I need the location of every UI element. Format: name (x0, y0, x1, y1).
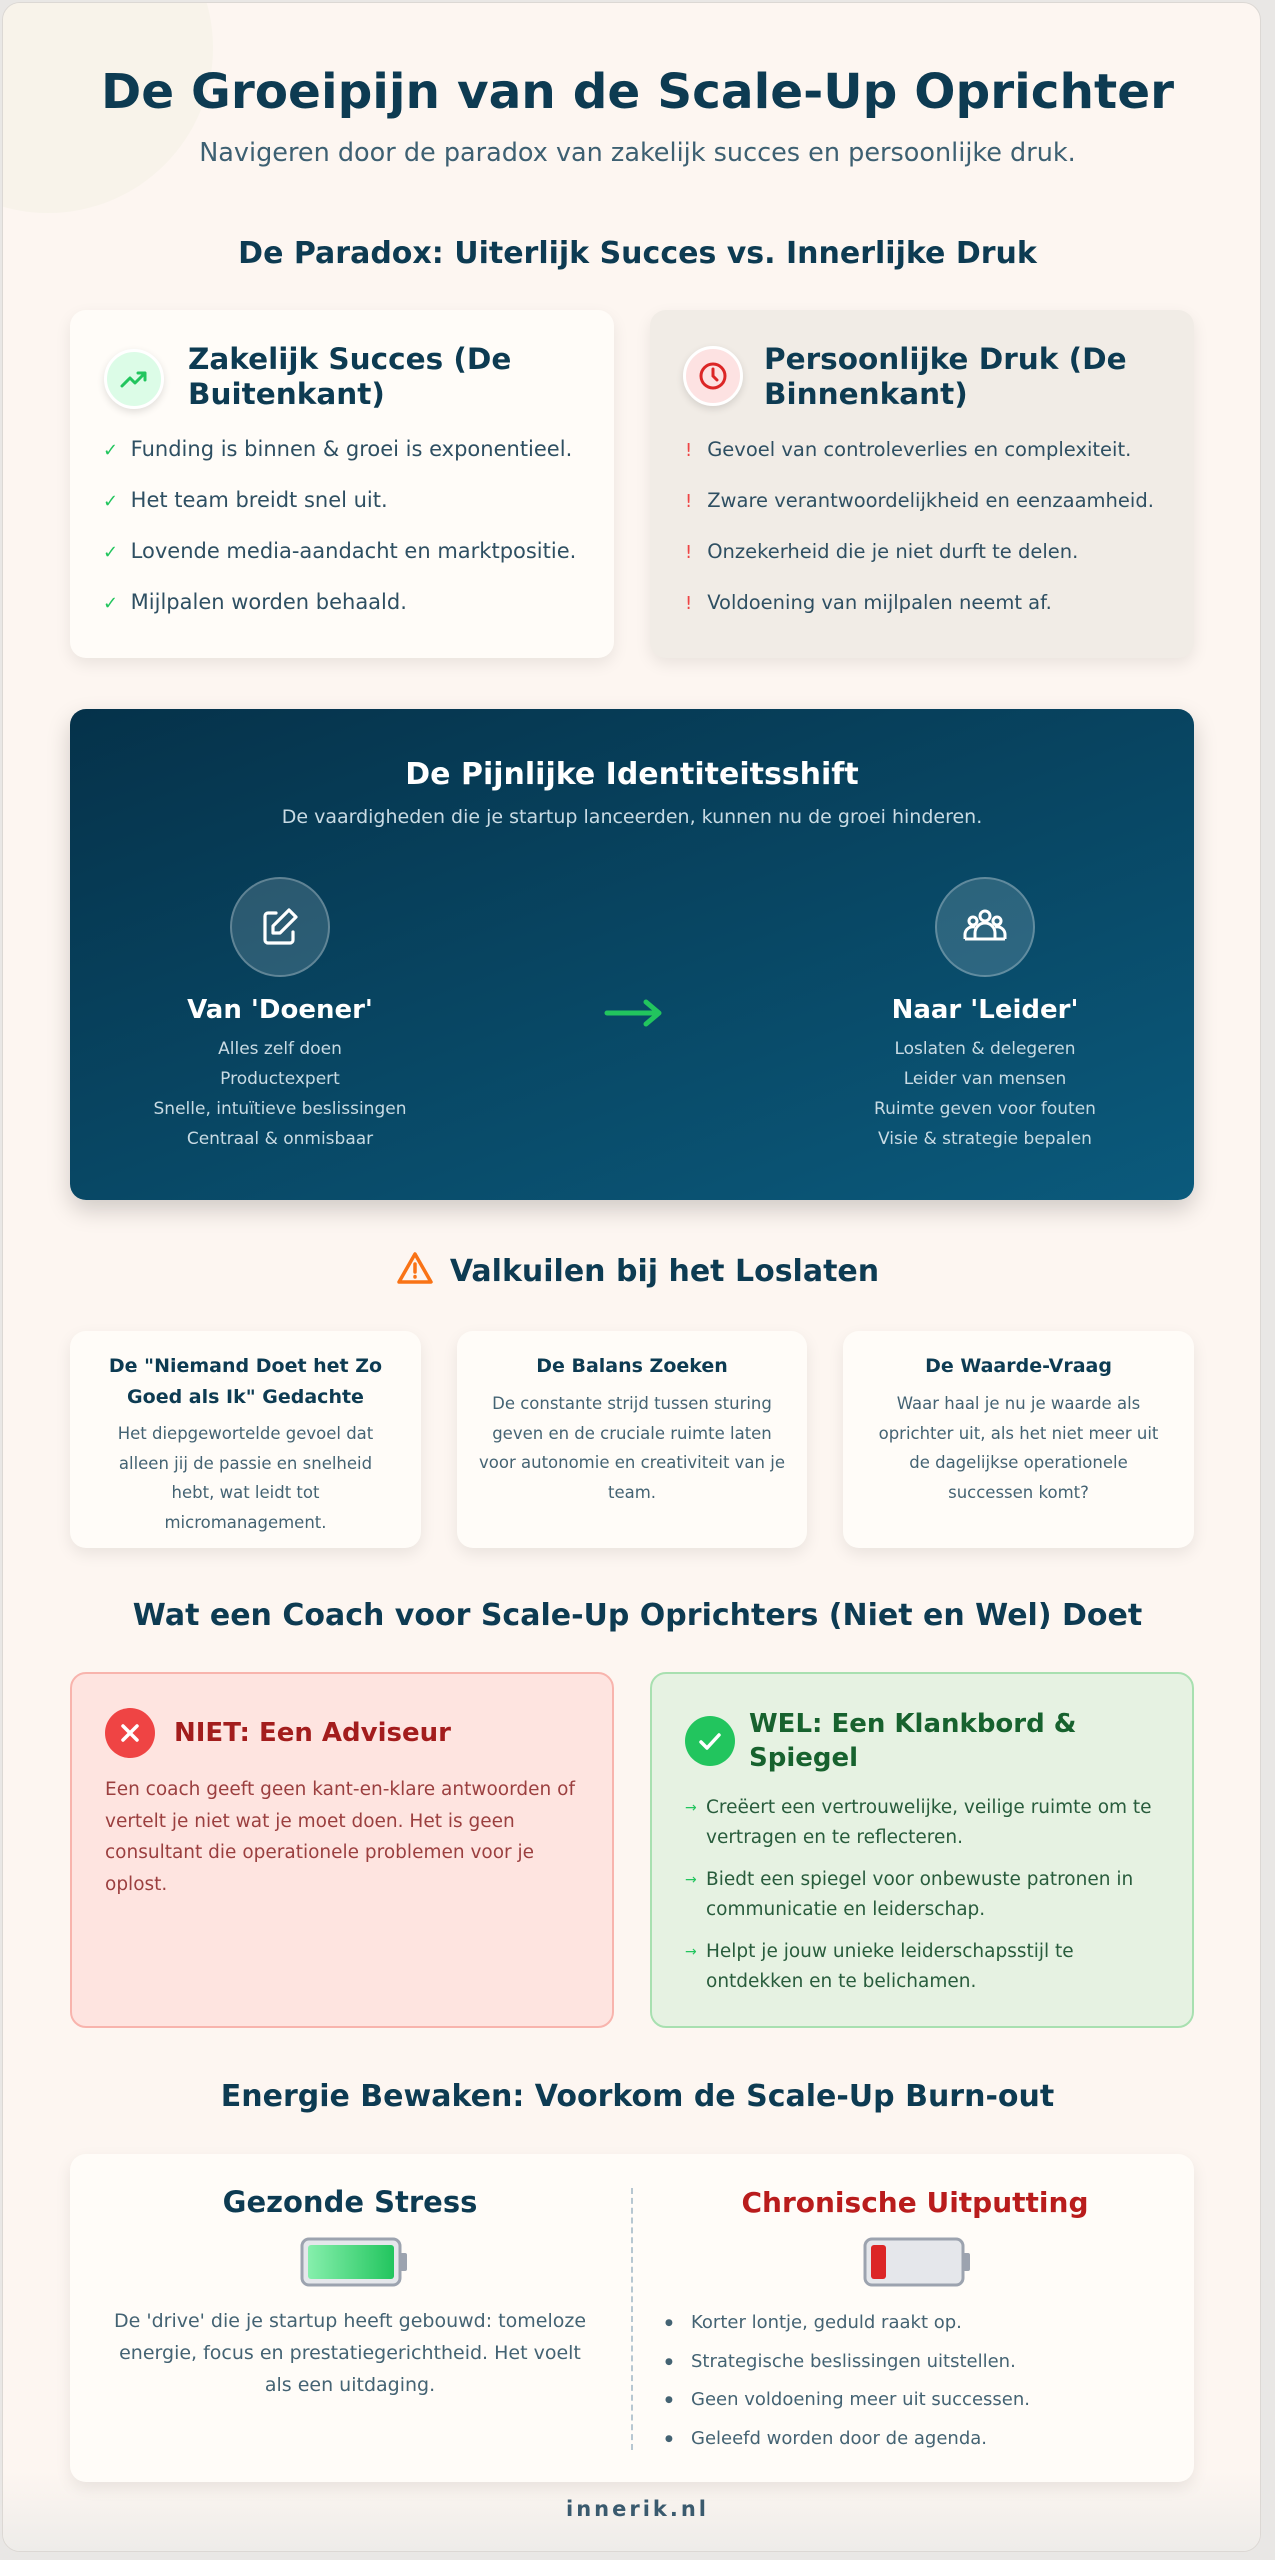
heading: coach: Wat een Coach voor Scale-Up Oprichters (Niet en Wel) Doet (133, 1598, 1142, 1633)
icon: clock (683, 346, 743, 406)
body: Een coach geeft geen kant-en-klare antwoorden of vertelt je niet wat je moet doen. Het is geen consultant die operationele problemen voor je oplost. (105, 1779, 575, 1894)
items (154, 1039, 406, 1149)
label: Van 'Doener' (187, 995, 373, 1025)
card heading: Binnenkant) (764, 377, 968, 411)
panel: zakelijk succes: Mijlpalen worden behaald. (131, 590, 407, 614)
panel: persoonlijke druk: Zware verantwoordelijkheid en eenzaamheid. (707, 489, 1154, 512)
list (685, 1797, 1152, 1992)
card heading (764, 342, 1127, 411)
column: doener (154, 877, 406, 1149)
panel: zakelijk succes: ✓ (103, 542, 118, 563)
card: balans (457, 1331, 807, 1548)
list (665, 2312, 1030, 2449)
panel: persoonlijke druk: Gevoel van controleverlies en complexiteit. (707, 438, 1131, 461)
title: De Waarde-Vraag (925, 1355, 1112, 1377)
items: Snelle, intuïtieve beslissingen (154, 1099, 406, 1119)
heading: De Pijnlijke Identiteitsshift (405, 757, 859, 792)
body: De 'drive' die je startup heeft gebouwd: tomeloze energie, focus en prestatiegerichtheid. Het voelt als een uitdaging. (114, 2310, 586, 2396)
heading: energie: Energie Bewaken: Voorkom de Scale-Up Burn-out (221, 2079, 1054, 2114)
list: ● (665, 2395, 673, 2405)
icon: low battery (864, 2238, 970, 2286)
panel: persoonlijke druk: Onzekerheid die je niet durft te delen. (707, 540, 1078, 563)
panel: zakelijk succes: ✓ (103, 491, 118, 512)
items: Centraal & onmisbaar (187, 1129, 373, 1149)
list: → (685, 1944, 697, 1960)
panel: persoonlijke druk: ! (685, 542, 692, 563)
panel: zakelijk succes: Lovende media-aandacht en marktpositie. (131, 539, 576, 563)
title: De Balans Zoeken (536, 1355, 728, 1377)
icon: trend up (104, 349, 164, 409)
items: Alles zelf doen (218, 1039, 342, 1059)
list: ● (665, 2357, 673, 2367)
column: gezonde stress (114, 2185, 586, 2396)
title: NIET: Een Adviseur (174, 1718, 451, 1748)
title: De Groeipijn van de Scale-Up Oprichter (101, 64, 1174, 120)
items: Loslaten & delegeren (894, 1039, 1076, 1059)
icon: full battery (300, 2238, 407, 2286)
list: → (685, 1872, 697, 1888)
list: Geleefd worden door de agenda. (691, 2428, 987, 2449)
label: Naar 'Leider' (892, 995, 1078, 1025)
list: Geen voldoening meer uit successen. (691, 2389, 1030, 2410)
body: Waar haal je nu je waarde als oprichter uit, als het niet meer uit de dagelijkse operationele successen komt? (879, 1394, 1158, 1502)
panel: niet (70, 1672, 614, 2028)
panel: zakelijk succes: Het team breidt snel uit. (131, 488, 388, 512)
title: WEL: Een Klankbord & (749, 1709, 1076, 1739)
arrow (604, 1000, 662, 1026)
list: Helpt je jouw unieke leiderschapsstijl te ontdekken en te belichamen. (706, 1941, 1074, 1992)
heading: valkuilen: Valkuilen bij het Loslaten (450, 1254, 879, 1289)
panel: energie (70, 2154, 1194, 2482)
panel: zakelijk succes: ✓ (103, 593, 118, 614)
icon: check (685, 1716, 735, 1766)
list: Korter lontje, geduld raakt op. (691, 2312, 962, 2333)
list: ● (665, 2318, 673, 2328)
list: ● (665, 2434, 673, 2444)
panel: persoonlijke druk: ! (685, 491, 692, 512)
icon: people (935, 877, 1035, 977)
title: Chronische Uitputting (741, 2186, 1089, 2219)
items: Visie & strategie bepalen (878, 1129, 1092, 1149)
list: → (685, 1800, 697, 1816)
body: De constante strijd tussen sturing geven en de cruciale ruimte laten voor autonomie en creativiteit van je team. (479, 1394, 785, 1502)
icon: edit (230, 877, 330, 977)
list: Biedt een spiegel voor onbewuste patronen in communicatie en leiderschap. (706, 1869, 1133, 1920)
panel: persoonlijke druk: ! (685, 593, 692, 614)
list: Creëert een vertrouwelijke, veilige ruimte om te vertragen en te reflecteren. (706, 1797, 1152, 1848)
subtitle: Navigeren door de paradox van zakelijk succes en persoonlijke druk. (199, 138, 1076, 168)
panel: persoonlijke druk: ! (685, 440, 692, 461)
items: Productexpert (220, 1069, 340, 1089)
column: leider (874, 877, 1096, 1149)
card: niemand doet (70, 1331, 421, 1548)
title: Spiegel (749, 1743, 858, 1773)
list (103, 437, 576, 614)
panel: zakelijk succes: Funding is binnen & groei is exponentieel. (131, 437, 572, 461)
list (685, 438, 1154, 614)
panel: persoonlijke druk (650, 310, 1194, 658)
subheading: De vaardigheden die je startup lanceerden, kunnen nu de groei hinderen. (282, 806, 982, 828)
card heading: Persoonlijke Druk (De (764, 342, 1127, 376)
title: De "Niemand Doet het Zo Goed als Ik" Gedachte (109, 1355, 382, 1408)
items: Ruimte geven voor fouten (874, 1099, 1096, 1119)
panel: wel (650, 1672, 1194, 2028)
body: Het diepgewortelde gevoel dat alleen jij de passie en snelheid hebt, wat leidt tot micromanagement. (118, 1424, 373, 1532)
card heading: Buitenkant) (188, 377, 385, 411)
panel: zakelijk succes: ✓ (103, 440, 118, 461)
items (874, 1039, 1096, 1149)
list: Strategische beslissingen uitstellen. (691, 2351, 1016, 2372)
footer: innerik.nl (566, 2497, 709, 2521)
panel: zakelijk succes (70, 310, 614, 658)
card heading: Zakelijk Succes (De (188, 342, 511, 376)
items: Leider van mensen (904, 1069, 1066, 1089)
card: waarde (843, 1331, 1194, 1548)
panel: persoonlijke druk: Voldoening van mijlpalen neemt af. (707, 591, 1052, 614)
column: chronische uitputting (665, 2186, 1089, 2449)
heading: paradox: De Paradox: Uiterlijk Succes vs. Innerlijke Druk (238, 236, 1037, 271)
panel: identiteitsshift (70, 709, 1194, 1200)
icon: x (105, 1708, 155, 1758)
title: Gezonde Stress (223, 2185, 477, 2219)
title (749, 1709, 1076, 1773)
card heading (188, 342, 511, 411)
